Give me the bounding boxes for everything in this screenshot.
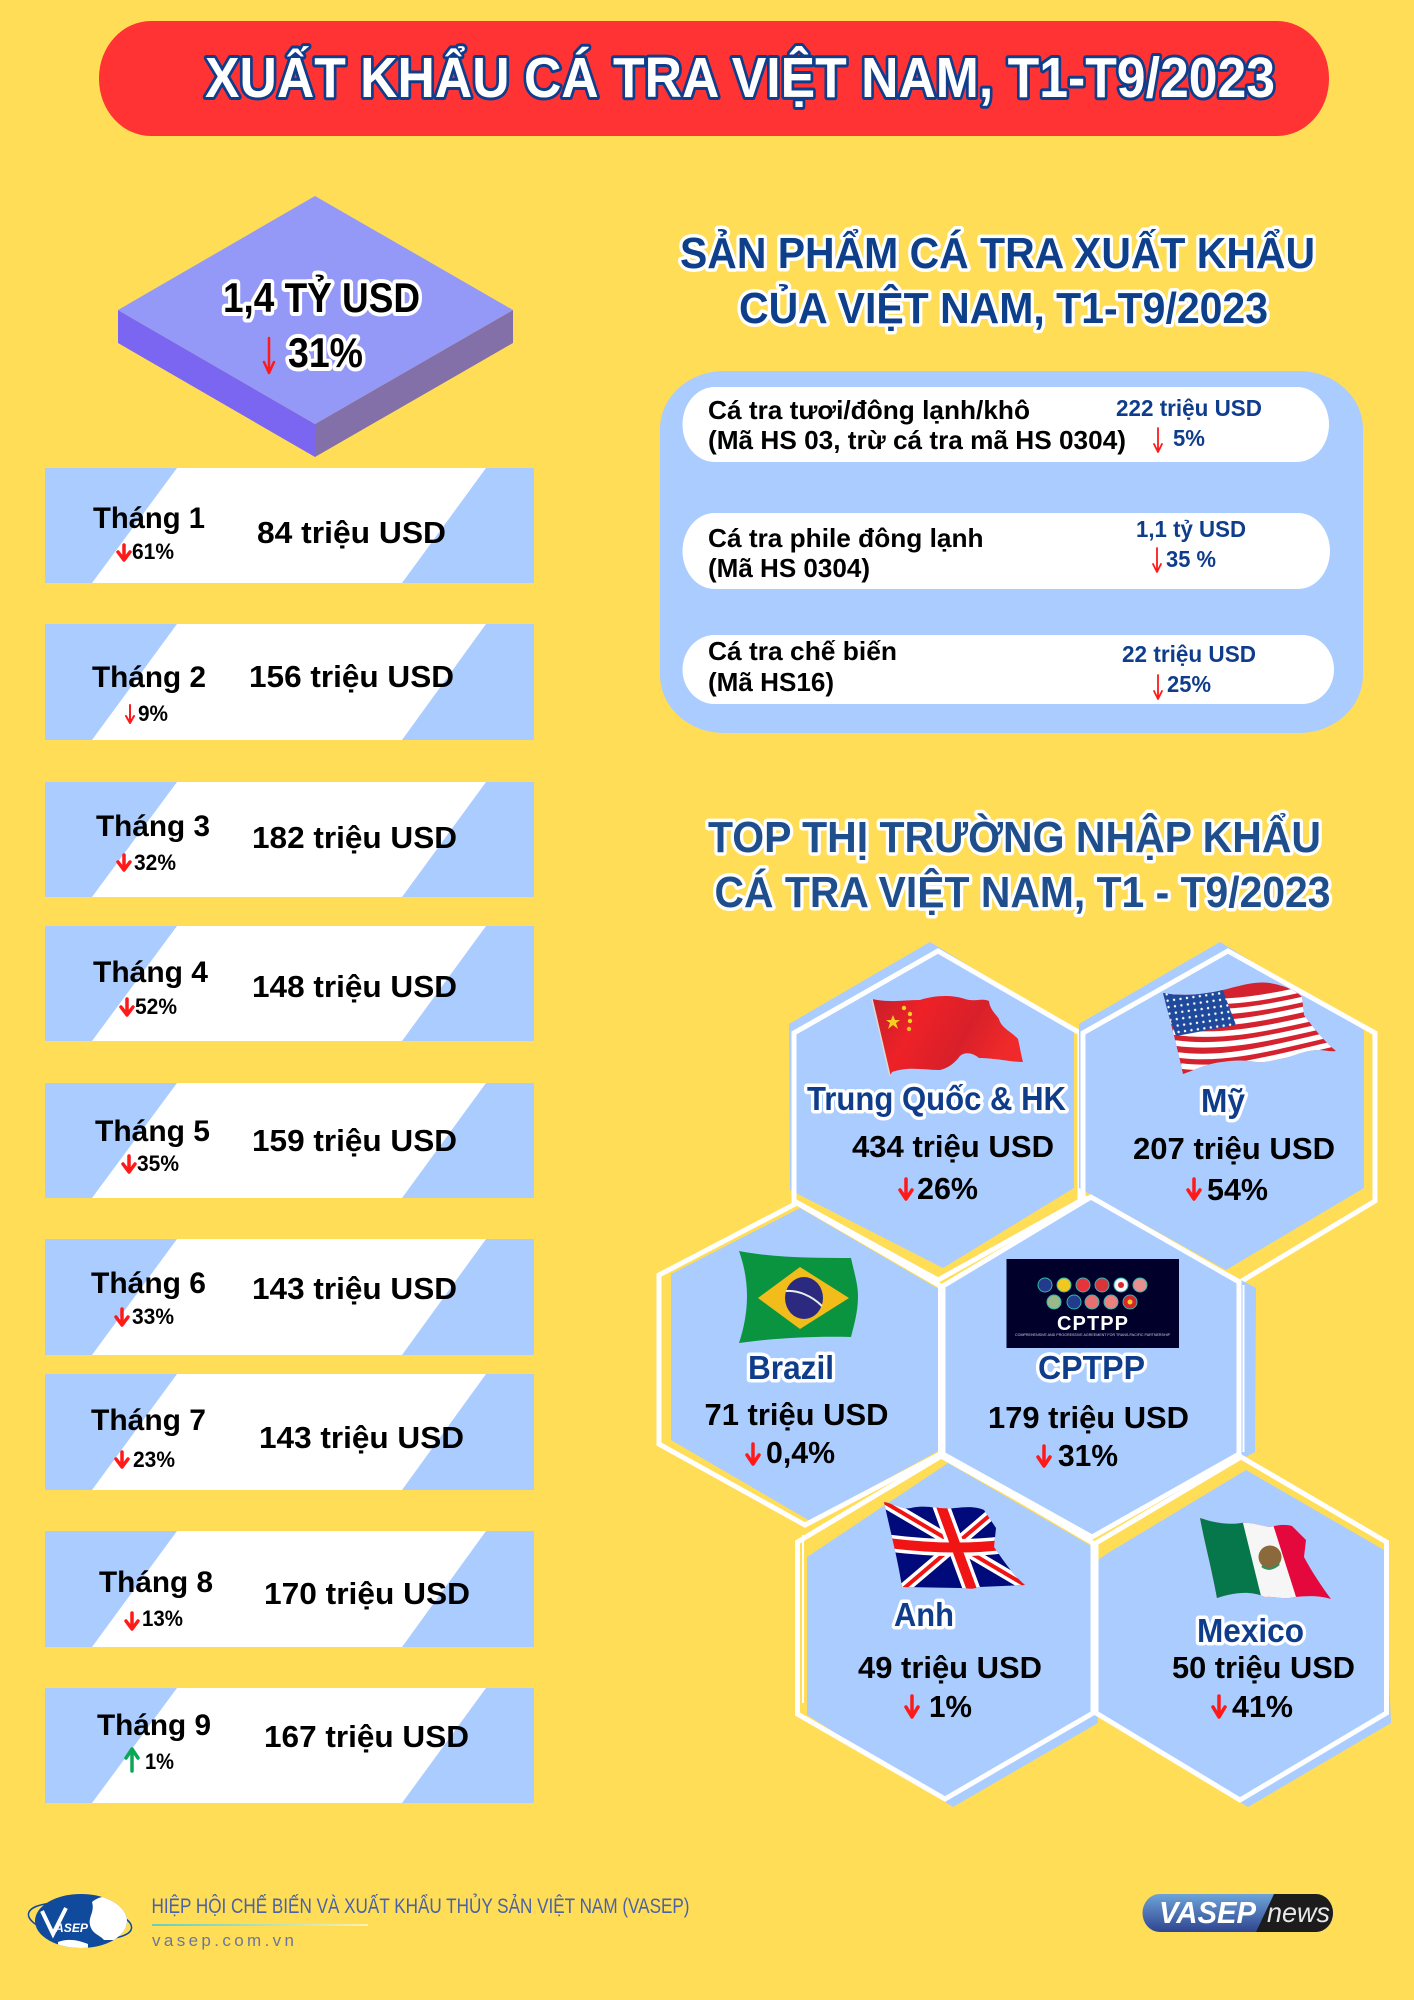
title banner bbox=[99, 21, 1329, 136]
flag: China bbox=[872, 996, 1023, 1076]
month 8 row bbox=[45, 1531, 534, 1647]
hexagon: China and Hong Kong: 26% bbox=[917, 1171, 978, 1206]
CPTPP logo bbox=[1006, 1259, 1179, 1348]
heading: top markets bbox=[708, 811, 1330, 917]
product row: processed: 22 triệu USD bbox=[1122, 641, 1256, 667]
month 7 row bbox=[45, 1374, 534, 1490]
hexagon: China and Hong Kong: 434 triệu USD bbox=[852, 1129, 1054, 1164]
CPTPP logo: CPTPP bbox=[1057, 1313, 1128, 1335]
month 4 row: Tháng 4 bbox=[93, 956, 208, 989]
month 2 row: 9% bbox=[138, 701, 168, 726]
product row: fresh frozen dried: 5% bbox=[1173, 425, 1205, 451]
total export diamond bbox=[118, 196, 513, 457]
hexagon: CPTPP: 31% bbox=[1058, 1438, 1118, 1473]
hexagon: China and Hong Kong: Trung Quốc & HK bbox=[807, 1080, 1066, 1117]
total export diamond: 31% bbox=[288, 329, 363, 376]
CPTPP logo: COMPREHENSIVE AND PROGRESSIVE AGREEMENT FOR TRANS-PACIFIC PARTNERSHIP bbox=[1015, 1333, 1171, 1337]
hexagon: USA: 207 triệu USD bbox=[1133, 1131, 1335, 1166]
month 6 row: Tháng 6 bbox=[91, 1267, 206, 1300]
hexagon: UK: Anh bbox=[894, 1596, 954, 1633]
heading: top markets: CÁ TRA VIỆT NAM, T1 - T9/2023 bbox=[714, 867, 1330, 917]
hexagon: Brazil bbox=[659, 1203, 940, 1525]
month 3 row: 182 triệu USD bbox=[252, 820, 457, 855]
month 6 row bbox=[45, 1239, 534, 1355]
total export diamond: 1,4 TỶ USD bbox=[223, 273, 420, 321]
month 1 row: 84 triệu USD bbox=[257, 515, 446, 550]
flag: UK bbox=[884, 1502, 1025, 1589]
logo: VASEP news badge bbox=[1142, 1894, 1334, 1932]
month 2 row: Tháng 2 bbox=[92, 661, 206, 694]
month 7 row: 23% bbox=[133, 1447, 175, 1472]
hexagon: Brazil: 71 triệu USD bbox=[704, 1397, 888, 1432]
flag: Brazil bbox=[739, 1251, 858, 1343]
product row: frozen fillet: Cá tra phile đông lạnh bbox=[708, 523, 984, 553]
product row: processed: (Mã HS16) bbox=[708, 667, 834, 697]
hexagon: CPTPP: CPTPP bbox=[1038, 1349, 1145, 1386]
heading: top markets: TOP THỊ TRƯỜNG NHẬP KHẨU bbox=[708, 811, 1321, 862]
heading: products: SẢN PHẨM CÁ TRA XUẤT KHẨU bbox=[680, 227, 1315, 278]
month 8 row: Tháng 8 bbox=[99, 1566, 213, 1599]
logo: VASEP news badge: VASEP bbox=[1159, 1895, 1256, 1930]
hexagon: CPTPP: 179 triệu USD bbox=[988, 1400, 1189, 1435]
month 6 row: 143 triệu USD bbox=[252, 1271, 457, 1306]
footer: association name bbox=[152, 1894, 690, 1950]
month 9 row: 167 triệu USD bbox=[264, 1719, 469, 1754]
month 8 row: 13% bbox=[142, 1606, 183, 1631]
hexagon: UK: 49 triệu USD bbox=[858, 1650, 1042, 1685]
hexagon: Brazil: 0,4% bbox=[766, 1435, 835, 1470]
heading: products: CỦA VIỆT NAM, T1-T9/2023 bbox=[739, 282, 1268, 333]
product row: processed: 25% bbox=[1167, 671, 1211, 697]
icon: VASEP logo bbox=[26, 1894, 134, 1950]
month 4 row: 148 triệu USD bbox=[252, 969, 457, 1004]
month 5 row: 35% bbox=[137, 1151, 179, 1176]
month 3 row: 32% bbox=[134, 850, 176, 875]
product row: fresh frozen dried: Cá tra tươi/đông lạnh/khô bbox=[708, 395, 1030, 425]
hexagon: USA: 54% bbox=[1207, 1172, 1268, 1207]
hexagon: CPTPP bbox=[943, 1197, 1256, 1537]
month 2 row: 156 triệu USD bbox=[249, 659, 454, 694]
hexagon: Brazil: Brazil bbox=[748, 1349, 834, 1386]
product row: frozen fillet bbox=[682, 513, 1330, 589]
hexagon: UK bbox=[798, 1455, 1098, 1807]
month 1 row: 61% bbox=[132, 539, 174, 564]
month 7 row: Tháng 7 bbox=[91, 1404, 206, 1437]
flag: Mexico bbox=[1200, 1518, 1331, 1599]
footer: association name: vasep.com.vn bbox=[152, 1931, 294, 1950]
hexagon: Mexico: 41% bbox=[1232, 1689, 1293, 1724]
month 4 row bbox=[45, 926, 534, 1041]
product row: frozen fillet: 35 % bbox=[1166, 546, 1216, 572]
month 3 row bbox=[45, 782, 534, 897]
month 9 row: Tháng 9 bbox=[97, 1709, 211, 1742]
hexagon: Mexico: 50 triệu USD bbox=[1172, 1650, 1355, 1685]
hexagon: USA: Mỹ bbox=[1201, 1082, 1246, 1119]
month 1 row: Tháng 1 bbox=[93, 502, 205, 535]
month 9 row: 1% bbox=[145, 1749, 174, 1774]
product row: fresh frozen dried: (Mã HS 03, trừ cá tra mã HS 0304) bbox=[708, 425, 1126, 455]
product row: fresh frozen dried: 222 triệu USD bbox=[1116, 395, 1262, 421]
month 3 row: Tháng 3 bbox=[96, 810, 210, 843]
product row: frozen fillet: (Mã HS 0304) bbox=[708, 553, 870, 583]
month 7 row: 143 triệu USD bbox=[259, 1420, 464, 1455]
logo: VASEP news badge: news bbox=[1267, 1897, 1330, 1928]
flag: USA bbox=[1163, 982, 1336, 1074]
month 5 row: Tháng 5 bbox=[95, 1115, 210, 1148]
title banner: XUẤT KHẨU CÁ TRA VIỆT NAM, T1-T9/2023 bbox=[205, 45, 1275, 110]
month 9 row bbox=[45, 1688, 534, 1803]
heading: products bbox=[680, 227, 1315, 333]
panel: products bbox=[660, 371, 1363, 733]
month 6 row: 33% bbox=[132, 1304, 174, 1329]
product row: frozen fillet: 1,1 tỷ USD bbox=[1136, 516, 1246, 542]
month 5 row bbox=[45, 1083, 534, 1198]
month 1 row bbox=[45, 468, 534, 583]
month 2 row bbox=[45, 624, 534, 740]
hexagon: USA bbox=[1079, 942, 1375, 1282]
icon: VASEP logo: ASEP bbox=[54, 1921, 89, 1935]
hexagon: China and Hong Kong bbox=[789, 942, 1080, 1280]
month 8 row: 170 triệu USD bbox=[264, 1576, 470, 1611]
product row: fresh frozen dried bbox=[682, 387, 1329, 462]
hexagon: Mexico: Mexico bbox=[1197, 1612, 1304, 1649]
hexagon: UK: 1% bbox=[929, 1689, 972, 1724]
footer: association name: HIỆP HỘI CHẾ BIẾN VÀ XUẤT KHẨU THỦY SẢN VIỆT NAM (VASEP) bbox=[152, 1894, 690, 1918]
product row: processed bbox=[682, 635, 1334, 704]
month 5 row: 159 triệu USD bbox=[252, 1123, 457, 1158]
hexagon: Mexico bbox=[943, 1456, 1391, 1807]
product row: processed: Cá tra chế biến bbox=[708, 636, 897, 666]
month 4 row: 52% bbox=[135, 994, 177, 1019]
